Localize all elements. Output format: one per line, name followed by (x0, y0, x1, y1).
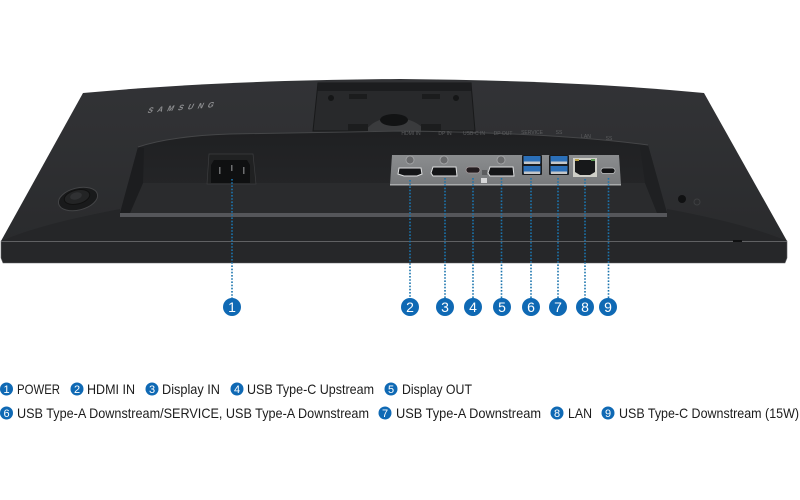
legend item 5: 5 (388, 384, 394, 396)
legend item 5: Display OUT (402, 381, 472, 397)
lock icons (481, 170, 487, 183)
monitor rear (1, 79, 787, 263)
legend item 7: 7 (382, 408, 388, 420)
port labels: DP OUT (494, 131, 512, 137)
callout badge 2: 2 (406, 299, 414, 315)
legend item 1 (0, 381, 60, 397)
callout line 3 (444, 178, 446, 298)
legend item 2: HDMI IN (87, 381, 135, 397)
callout badge 3: 3 (441, 299, 449, 315)
callout badge 8 (576, 298, 594, 316)
port labels: USB-C IN (463, 131, 485, 137)
callout line 1 (231, 179, 233, 298)
callout badge 4: 4 (469, 299, 477, 315)
port labels: SS (556, 130, 563, 136)
callout badge 8: 8 (581, 299, 589, 315)
callout line 5 (500, 178, 502, 298)
legend item 3: Display IN (162, 381, 220, 397)
port labels: HDMI IN (401, 131, 421, 137)
monitor front edge (1, 241, 787, 263)
callout badge 2 (401, 298, 419, 316)
legend item 6: USB Type-A Downstream/SERVICE, USB Type-A Downstream (17, 405, 369, 421)
port labels: SS (606, 136, 613, 142)
legend item 2 (70, 381, 135, 397)
rear stand mount recess (313, 83, 475, 131)
callout badge 3 (436, 298, 454, 316)
port labels: LAN (581, 134, 591, 140)
legend item 3: 3 (149, 384, 155, 396)
legend item 8: 8 (554, 408, 560, 420)
lower chamfer (1, 209, 787, 241)
legend item 6: 6 (3, 408, 10, 420)
legend item 2: 2 (74, 384, 80, 396)
callout badge 6: 6 (527, 299, 535, 315)
display out port (488, 156, 514, 176)
callout line 2 (409, 180, 411, 298)
lan port (573, 158, 597, 177)
callout badge 5: 5 (498, 299, 506, 315)
legend item 1: 1 (3, 384, 10, 396)
port labels: SERVICE (521, 130, 544, 136)
callout badge 1: 1 (228, 299, 236, 315)
legend item 8 (550, 405, 592, 421)
display in port (431, 156, 457, 176)
usb-a pair 7 (549, 155, 569, 175)
callout line 9 (608, 178, 610, 298)
screw holes (678, 195, 700, 205)
callout line 8 (584, 179, 586, 298)
legend item 4: USB Type-C Upstream (247, 381, 374, 397)
port plate (390, 155, 621, 186)
callout line 4 (472, 178, 474, 298)
callout badge 7: 7 (554, 299, 562, 315)
legend item 1: POWER (17, 381, 60, 397)
usb-c upstream port (466, 167, 480, 173)
legend item 8: LAN (568, 405, 592, 421)
edge notch (733, 240, 742, 242)
callout badge 5 (493, 298, 511, 316)
callout badge 1 (223, 298, 241, 316)
callout line 6 (530, 178, 532, 298)
port labels (401, 130, 613, 142)
callout badge 9 (599, 298, 617, 316)
callout badge 4 (464, 298, 482, 316)
joystick button (56, 183, 100, 215)
legend item 9: 9 (605, 408, 611, 420)
callout line 7 (557, 178, 559, 298)
callout badge 9: 9 (604, 299, 612, 315)
callout badge 6 (522, 298, 540, 316)
usb-c downstream port (601, 168, 615, 174)
callout badge 7 (549, 298, 567, 316)
port labels: DP IN (438, 131, 452, 137)
connector recess (120, 131, 667, 217)
legend (0, 381, 799, 421)
samsung wordmark: SAMSUNG (146, 100, 216, 115)
usb-a pair 6 (522, 155, 542, 175)
monitor back shell (1, 79, 787, 241)
legend item 7: USB Type-A Downstream (396, 405, 541, 421)
power socket (207, 154, 256, 184)
hdmi port (398, 156, 422, 176)
legend item 4: 4 (234, 384, 240, 396)
